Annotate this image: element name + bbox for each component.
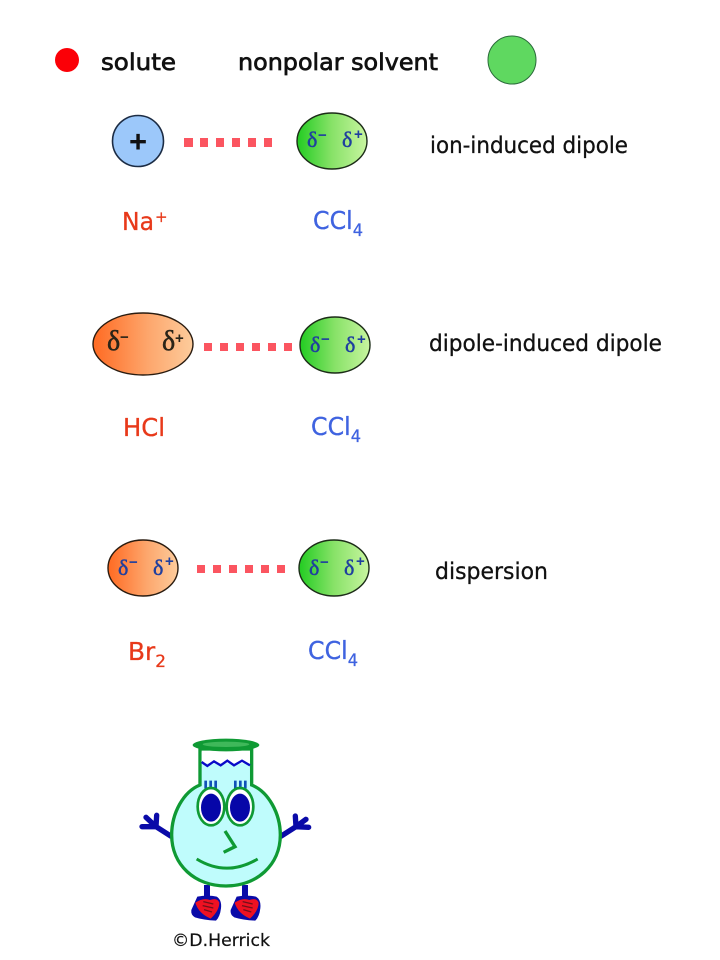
CCl4 induced dipole: + [354,126,363,143]
smile [197,859,258,868]
label: Br2: 2 [155,652,166,672]
CCl4 induced dipole: − [321,331,330,348]
HCl dipole [93,313,193,375]
flask mascot [142,739,309,921]
icon: solvent green circle [488,36,536,84]
attraction dashes [184,138,272,147]
row: dispersion [108,540,548,672]
copyright: ©D.Herrick [172,931,270,951]
legs [204,885,248,899]
Br2 temporary dipole [108,540,178,596]
label: dispersion: dispersion [435,559,548,585]
CCl4 induced dipole: δ [345,332,355,357]
CCl4 induced dipole: δ [310,332,320,357]
label: Na+: Na [122,207,154,236]
nose [224,831,235,852]
label: dipole-induced dipole: dipole-induced dipole [429,331,662,357]
label: CCl4: CCl [311,412,353,441]
arms [142,815,309,836]
CCl4 induced dipole [299,540,369,596]
CCl4 induced dipole: δ [309,555,319,580]
CCl4 induced dipole: − [320,554,329,571]
Br2 temporary dipole: − [129,554,138,571]
attraction dashes [197,565,285,573]
icon: solute red dot [55,48,79,72]
CCl4 induced dipole: δ [342,127,352,152]
row: ion-induced dipole [112,113,628,241]
HCl dipole: δ [107,326,120,357]
label: CCl4: CCl [308,636,350,665]
HCl dipole: + [175,330,184,347]
attraction dashes [204,343,292,351]
CCl4 induced dipole: + [357,331,366,348]
Br2 temporary dipole: + [165,553,174,570]
label: Br2: Br [128,637,155,666]
sodium ion: + [129,124,147,159]
sodium ion [112,116,164,166]
legend label: solute: solute [101,50,176,76]
eyelashes [206,781,245,789]
HCl dipole: − [120,329,129,346]
legend label: nonpolar solvent: nonpolar solvent [238,50,438,76]
row: dipole-induced dipole [93,313,662,447]
Br2 temporary dipole: δ [153,555,163,580]
label: ion-induced dipole: ion-induced dipole [430,133,628,159]
feet [191,896,260,921]
Br2 temporary dipole: δ [118,555,128,580]
eyes [198,788,253,825]
CCl4 induced dipole: − [318,127,327,144]
CCl4 induced dipole: δ [344,555,354,580]
CCl4 induced dipole: δ [307,127,317,152]
label: CCl4: 4 [348,651,358,671]
CCl4 induced dipole [300,317,370,373]
label: HCl: HCl [123,413,165,442]
CCl4 induced dipole: + [356,553,365,570]
label: CCl4: CCl [313,206,355,235]
label: CCl4: 4 [353,221,363,241]
legend [55,36,536,84]
CCl4 induced dipole [297,113,367,169]
flask rim [193,739,259,751]
flask body [172,750,280,886]
label: Na+: + [155,208,168,226]
label: CCl4: 4 [351,427,361,447]
HCl dipole: δ [162,326,175,357]
liquid wave [202,761,250,766]
